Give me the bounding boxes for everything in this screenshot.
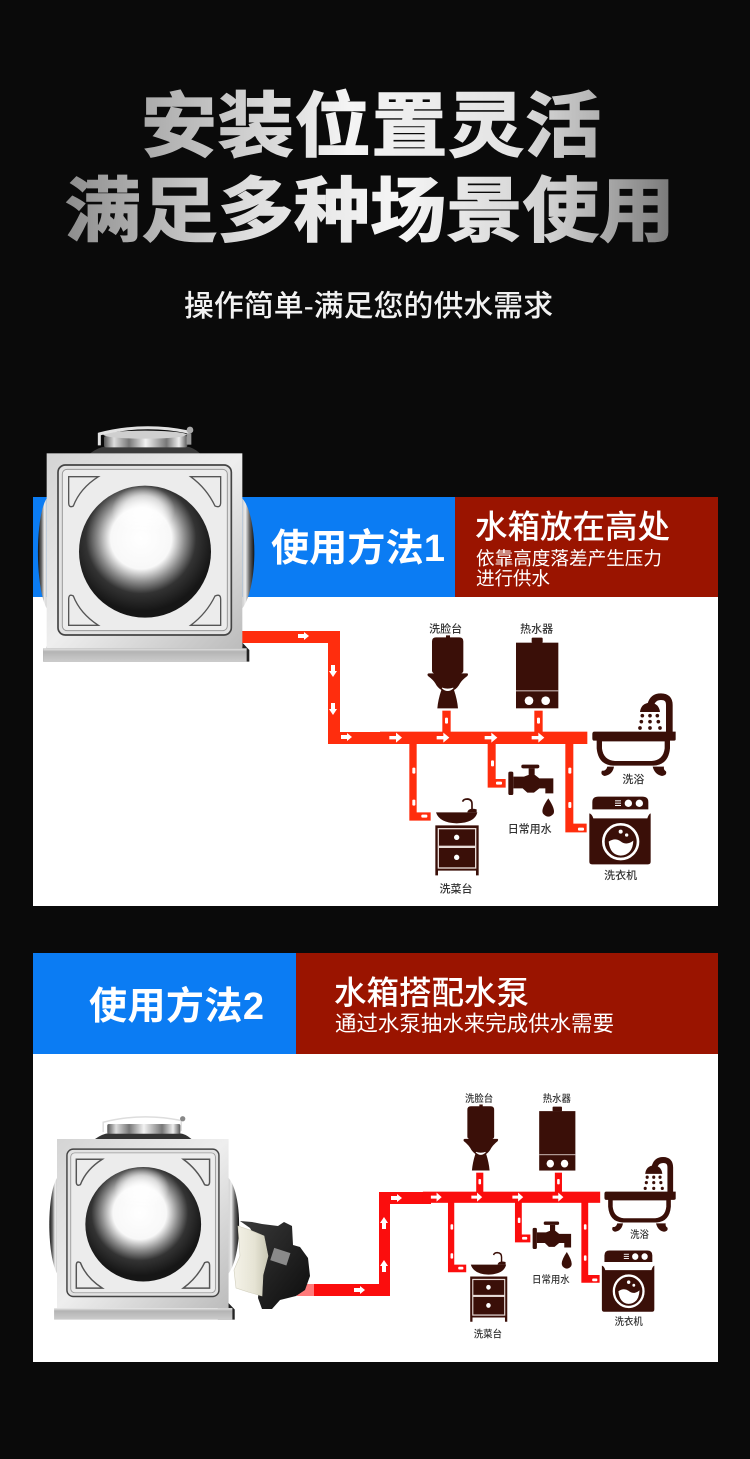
fixture labels: 热水器	[520, 622, 553, 636]
fixture labels: 洗浴	[622, 772, 644, 786]
title: 满足多种场景使用	[65, 172, 675, 251]
icon: tap with drop	[533, 1222, 572, 1269]
fixture labels: 洗菜台	[440, 882, 472, 896]
icon: bathtub with shower	[592, 697, 676, 776]
icon: kitchen sink cabinet	[435, 799, 479, 875]
subtitle: 操作简单-满足您的供水需求	[184, 290, 553, 323]
icon: bathtub with shower	[604, 1160, 676, 1232]
title	[65, 87, 675, 251]
water tank 2	[49, 1116, 239, 1320]
icon: washing machine	[589, 797, 651, 864]
fixture labels	[429, 622, 644, 896]
panel: method 2	[33, 953, 718, 1362]
method 2 red header	[296, 953, 718, 1054]
icon: wash basin toilet	[427, 635, 468, 708]
icon: wash basin toilet	[463, 1104, 498, 1171]
method 1 blue header: 使用方法1	[271, 528, 445, 570]
plumbing and fixtures 1	[380, 622, 676, 896]
red pipes	[423, 1173, 600, 1283]
red pipes	[380, 711, 587, 832]
water tank 1	[38, 427, 254, 662]
method 2 diagram background	[33, 1054, 718, 1362]
fixture labels: 洗衣机	[615, 1315, 643, 1328]
water pump	[234, 1221, 310, 1309]
pipe: pump to main line	[297, 1192, 431, 1296]
method 1 diagram background	[33, 597, 718, 906]
icon: water heater	[539, 1107, 575, 1171]
fixture labels: 洗浴	[630, 1228, 649, 1241]
icon: washing machine	[602, 1251, 654, 1312]
pipe: tank to main line	[240, 631, 382, 744]
fixture labels: 洗衣机	[604, 868, 637, 882]
plumbing and fixtures 2	[423, 1092, 676, 1340]
method 2 blue header	[33, 953, 296, 1054]
method 1 red header: 依靠高度落差产生压力	[476, 548, 662, 569]
fixture labels: 洗脸台	[465, 1092, 493, 1105]
fixture labels: 洗脸台	[429, 622, 462, 636]
fixture labels	[465, 1092, 649, 1340]
method 1 red header: 水箱放在高处	[475, 509, 670, 545]
fixture labels: 热水器	[543, 1092, 571, 1105]
fixture labels: 日常用水	[532, 1273, 570, 1286]
method 2 blue header: 使用方法2	[89, 986, 264, 1028]
icon: tap with drop	[508, 765, 554, 817]
icon: water heater	[516, 638, 558, 708]
method 2 red header: 通过水泵抽水来完成供水需要	[335, 1012, 614, 1036]
method 1 blue header	[33, 497, 455, 597]
fixture labels: 日常用水	[508, 822, 552, 836]
method 1 red header	[455, 497, 718, 597]
title: 安装位置灵活	[141, 87, 601, 166]
icon: kitchen sink cabinet	[470, 1253, 507, 1322]
method 2 red header: 水箱搭配水泵	[334, 975, 529, 1011]
panel: method 1	[33, 427, 718, 906]
method 1 red header: 进行供水	[476, 568, 550, 589]
fixture labels: 洗菜台	[474, 1327, 502, 1340]
